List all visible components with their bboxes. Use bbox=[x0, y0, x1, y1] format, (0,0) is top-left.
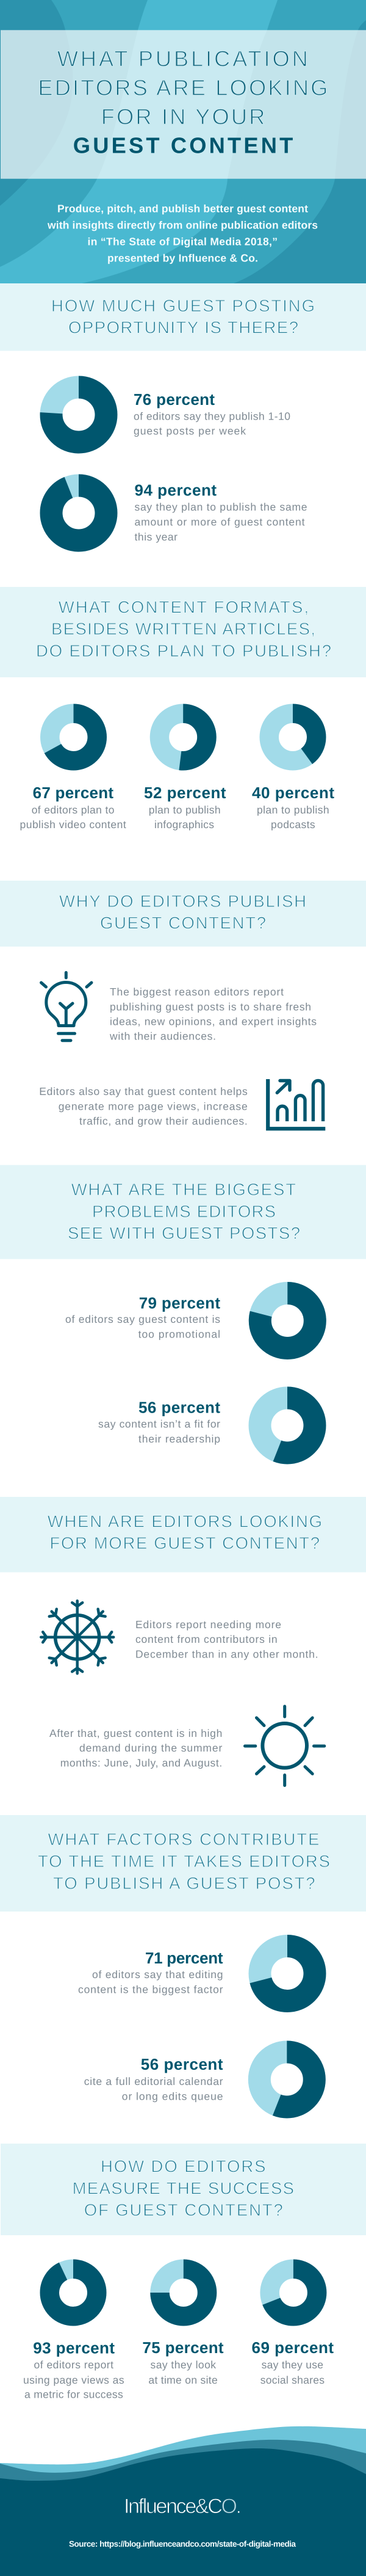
stat text bbox=[252, 784, 334, 831]
stat text: infographics bbox=[154, 818, 214, 831]
heading: when are editors looking: FOR MORE GUEST CONTENT? bbox=[50, 1534, 320, 1552]
stat text bbox=[142, 2338, 224, 2386]
text: editors also say bbox=[39, 1085, 248, 1127]
stat text: 56 percent bbox=[138, 1398, 220, 1416]
stat text: 94 percent bbox=[134, 481, 217, 500]
heading: what content formats: BESIDES WRITTEN ARTICLES, bbox=[51, 619, 315, 638]
stat text bbox=[78, 1949, 223, 1995]
heading: how do editors measure: HOW DO EDITORS bbox=[101, 2156, 266, 2175]
intro text: in “The State of Digital Media 2018,” bbox=[88, 236, 278, 248]
stat text: 69 percent bbox=[251, 2338, 334, 2357]
stat text: plan to publish bbox=[257, 804, 329, 816]
stat text: 79 percent bbox=[139, 1293, 220, 1312]
stat text: social shares bbox=[260, 2374, 325, 2386]
icon: sun bbox=[245, 1706, 325, 1786]
title: FOR IN YOUR bbox=[101, 104, 265, 129]
stat: 56 percent readership bbox=[98, 1398, 315, 1453]
stat text: 93 percent bbox=[33, 2339, 115, 2357]
stat: 56 percent calendar bbox=[84, 2052, 314, 2107]
stat text: 76 percent bbox=[134, 390, 215, 409]
stat text: or long edits queue bbox=[122, 2090, 223, 2102]
heading: why do editors publish bbox=[0, 881, 366, 947]
heading: what factors contribute: WHAT FACTORS CONTRIBUTE bbox=[48, 1830, 320, 1849]
icon: growth chart bbox=[268, 1079, 325, 1129]
stat: 52 percent bbox=[144, 713, 226, 831]
stat text: using page views as bbox=[23, 2374, 124, 2386]
stat text: a metric for success bbox=[24, 2389, 123, 2401]
stat text: say they plan to publish the same bbox=[134, 501, 307, 513]
stat: 71 percent bbox=[78, 1946, 315, 2001]
stat text bbox=[98, 1398, 220, 1445]
stat text: at time on site bbox=[148, 2374, 218, 2386]
stat text: 75 percent bbox=[142, 2338, 224, 2357]
text: biggest reason: ideas, new opinions, and expert insights bbox=[110, 1016, 317, 1028]
stat: 94 percent bbox=[51, 481, 307, 543]
text: biggest reason bbox=[109, 986, 317, 1042]
stat text: say they use bbox=[262, 2359, 323, 2371]
text: biggest reason: with their audiences. bbox=[109, 1030, 216, 1042]
stat text: of editors plan to bbox=[32, 804, 115, 816]
stat text bbox=[251, 2338, 334, 2386]
donut chart: 52 percent bbox=[159, 713, 207, 761]
heading: how much guest posting opportunity: HOW MUCH GUEST POSTING bbox=[51, 296, 315, 315]
stat text: publish video content bbox=[20, 818, 126, 831]
stat text: guest posts per week bbox=[134, 425, 246, 437]
stat text: 52 percent bbox=[144, 784, 226, 802]
stat text: their readership bbox=[138, 1433, 220, 1445]
donut chart: 93 percent bbox=[49, 2269, 97, 2316]
panel: header bbox=[0, 0, 366, 283]
stat: 69 percent bbox=[251, 2269, 334, 2386]
intro text: presented by Influence & Co. bbox=[107, 252, 258, 264]
stat text: this year bbox=[134, 531, 178, 543]
heading: how do editors measure: OF GUEST CONTENT? bbox=[84, 2200, 283, 2219]
panel: footer bbox=[0, 2426, 366, 2576]
heading: what content formats: DO EDITORS PLAN TO PUBLISH? bbox=[36, 641, 331, 660]
heading: what factors contribute bbox=[0, 1815, 366, 1912]
title: EDITORS ARE LOOKING bbox=[38, 75, 328, 100]
stat text: say they look bbox=[150, 2359, 216, 2371]
stat text: 71 percent bbox=[145, 1949, 223, 1967]
stat text: content is the biggest factor bbox=[78, 1983, 223, 1995]
text: biggest reason: publishing guest posts is to share fresh bbox=[110, 1000, 311, 1013]
heading: when are editors looking bbox=[0, 1497, 366, 1572]
text: editors also say: generate more page views, increase bbox=[59, 1100, 248, 1112]
title bbox=[38, 46, 328, 158]
heading: biggest problems bbox=[0, 1165, 366, 1259]
stat: 75 percent bbox=[142, 2269, 224, 2386]
heading: what content formats bbox=[0, 587, 366, 677]
heading: how much guest posting opportunity: OPPORTUNITY IS THERE? bbox=[68, 318, 298, 337]
stat text bbox=[134, 481, 307, 543]
stat text: cite a full editorial calendar bbox=[84, 2075, 223, 2087]
heading: why do editors publish: WHY DO EDITORS PUBLISH bbox=[59, 892, 306, 911]
stat text: of editors say guest content is bbox=[65, 1313, 220, 1325]
stat text: 40 percent bbox=[252, 784, 334, 802]
heading: biggest problems: WHAT ARE THE BIGGEST bbox=[71, 1180, 296, 1199]
heading: when are editors looking: WHEN ARE EDITORS LOOKING bbox=[48, 1512, 322, 1530]
stat text: of editors say that editing bbox=[92, 1968, 223, 1981]
intro text: with insights directly from online publication editors bbox=[47, 219, 318, 231]
donut chart: 71 percent bbox=[260, 1946, 315, 2001]
heading: what factors contribute: TO PUBLISH A GUEST POST? bbox=[53, 1874, 315, 1893]
heading: biggest problems: SEE WITH GUEST POSTS? bbox=[68, 1224, 300, 1243]
stat text: of editors say they publish 1-10 bbox=[134, 410, 290, 423]
stat text: podcasts bbox=[271, 818, 315, 831]
stat text bbox=[134, 390, 290, 437]
text: editors also say: traffic, and grow their audiences. bbox=[79, 1115, 248, 1127]
text: summer demand: After that, guest content is in high bbox=[49, 1727, 222, 1739]
text: editors also say: Editors also say that guest content helps bbox=[39, 1085, 248, 1097]
stat text bbox=[65, 1293, 220, 1341]
heading: how much guest posting opportunity bbox=[0, 283, 366, 351]
stat: 76 percent bbox=[51, 387, 290, 442]
stat: 67 percent bbox=[20, 713, 126, 831]
stat text: too promotional bbox=[138, 1328, 220, 1341]
title: WHAT PUBLICATION bbox=[57, 46, 308, 71]
heading: biggest problems: PROBLEMS EDITORS bbox=[92, 1202, 276, 1221]
heading: what factors contribute: TO THE TIME IT TAKES EDITORS bbox=[38, 1852, 330, 1871]
stat text: of editors report bbox=[34, 2359, 113, 2371]
stat text: amount or more of guest content bbox=[134, 515, 305, 528]
donut chart: 75 percent bbox=[160, 2269, 207, 2316]
text: December demand: December than in any other month. bbox=[135, 1648, 318, 1661]
donut chart: 56 percent bbox=[260, 1398, 315, 1453]
heading: why do editors publish: GUEST CONTENT? bbox=[100, 914, 266, 932]
donut chart: 56 percent bbox=[259, 2052, 314, 2107]
stat text bbox=[20, 784, 126, 831]
donut chart: 94 percent bbox=[51, 486, 106, 540]
heading: how do editors measure bbox=[1, 2144, 366, 2235]
stat text: say content isn’t a fit for bbox=[98, 1418, 220, 1430]
text: biggest reason: The biggest reason editors report bbox=[110, 986, 284, 998]
stat: 93 percent bbox=[23, 2269, 124, 2401]
text: December demand bbox=[135, 1618, 318, 1661]
stat text: 56 percent bbox=[141, 2055, 223, 2073]
source line: Source: https://blog.influenceandco.com/state-of-digital-media bbox=[69, 2539, 296, 2549]
stat text bbox=[144, 784, 226, 831]
text: summer demand: months: June, July, and August. bbox=[60, 1756, 222, 1769]
text: summer demand: demand during the summer bbox=[79, 1742, 222, 1754]
icon: snowflake bbox=[41, 1601, 113, 1673]
donut chart: 40 percent bbox=[269, 713, 317, 761]
stat text bbox=[23, 2339, 124, 2401]
text: December demand: Editors report needing more bbox=[135, 1618, 281, 1631]
donut chart: 67 percent bbox=[50, 713, 97, 761]
text: summer demand bbox=[49, 1727, 222, 1769]
stat text: 67 percent bbox=[33, 784, 113, 802]
intro text bbox=[47, 203, 318, 264]
donut chart: 79 percent bbox=[260, 1293, 315, 1348]
title: GUEST CONTENT bbox=[73, 133, 293, 158]
donut chart: 69 percent bbox=[270, 2269, 317, 2316]
stat: 40 percent bbox=[252, 713, 334, 831]
icon: lightbulb bbox=[41, 972, 92, 1041]
intro text: Produce, pitch, and publish better guest content bbox=[57, 203, 308, 215]
stat: 79 percent bbox=[65, 1293, 315, 1348]
stat text bbox=[84, 2055, 223, 2102]
donut chart: 76 percent bbox=[51, 387, 106, 442]
stat text: plan to publish bbox=[149, 804, 221, 816]
text: December demand: content from contributors in bbox=[135, 1633, 278, 1645]
logo: Influence&CO. bbox=[124, 2495, 242, 2518]
heading: how do editors measure: MEASURE THE SUCCESS bbox=[73, 2179, 294, 2197]
heading: what content formats: WHAT CONTENT FORMATS, bbox=[59, 598, 309, 617]
